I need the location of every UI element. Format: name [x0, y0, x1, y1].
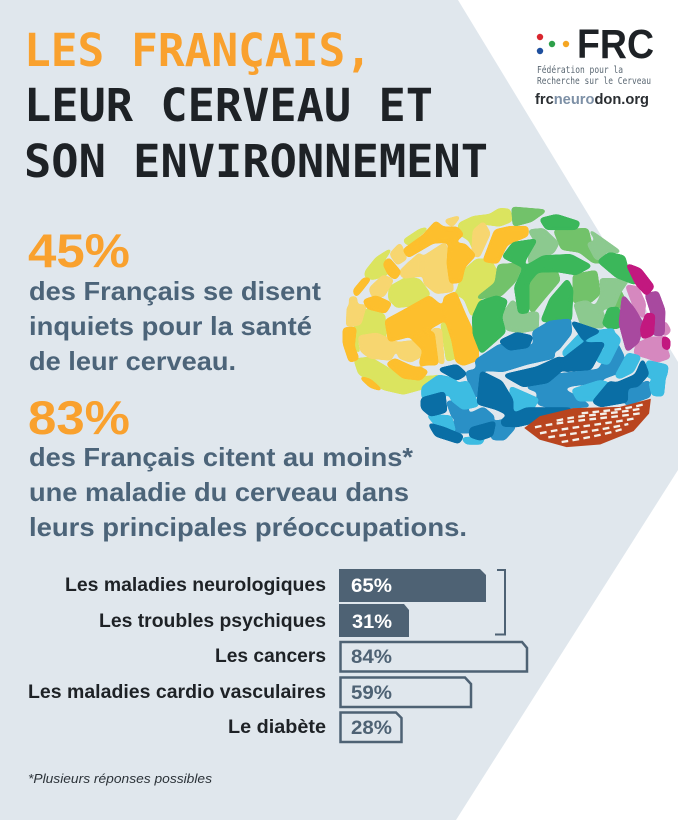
title: SON ENVIRONNEMENT [24, 135, 488, 188]
statistic: 45%: inquiets pour la santé [29, 311, 312, 341]
bar chart: diseases [28, 569, 527, 742]
logo: FRC: frcneurodon.org [535, 91, 649, 108]
statistic: 83%: des Français citent au moins* [29, 442, 414, 472]
brain: occipital lobe pink [627, 286, 670, 361]
brain: frontal lobe pale [347, 217, 489, 364]
logo: FRC: FRC [577, 21, 654, 67]
icon: coloured brain [344, 208, 670, 447]
statistic: 45%: 45% [28, 224, 130, 277]
brain: temporal lobe light blue [423, 329, 667, 443]
row: Les maladies cardio vasculaires 59%: 59% [351, 683, 392, 704]
statistic: 83%: 83% [28, 391, 130, 444]
logo: FRC: Recherche sur le Cerveau [537, 76, 651, 87]
row: Les cancers 84% [215, 642, 527, 672]
row: Les maladies neurologiques 65% [65, 569, 486, 602]
statistic: 83% [28, 391, 467, 542]
brain: parietal lobe green [473, 215, 636, 353]
brain: occipital lobe purple [620, 292, 664, 351]
statistic: 83%: leurs principales préoccupations. [29, 512, 467, 542]
row: Les maladies neurologiques 65%: 65% [351, 576, 392, 597]
row: Les cancers 84%: Les cancers [215, 646, 326, 667]
title: LEUR CERVEAU ET [24, 79, 433, 132]
brain: parietal lobe pale green [503, 229, 628, 332]
brain: parietal lobe mid green [477, 208, 626, 313]
row: Les troubles psychiques 31% [99, 604, 409, 637]
row: Les maladies cardio vasculaires 59% [28, 678, 471, 707]
row: Le diabète 28%: Le diabète [228, 717, 326, 738]
logo: FRC [535, 21, 654, 108]
row: Les troubles psychiques 31%: 31% [352, 612, 392, 633]
statistic: 45% [28, 224, 321, 376]
bracket [495, 570, 505, 634]
brain: temporal lobe mid blue [447, 320, 650, 439]
brain: frontal lobe orange [344, 222, 527, 390]
row: Les maladies cardio vasculaires 59%: Les maladies cardio vasculaires [28, 682, 326, 703]
row: Les troubles psychiques 31%: Les troubles psychiques [99, 611, 326, 632]
row: Les cancers 84%: 84% [351, 647, 392, 668]
brain: cerebellum [525, 399, 650, 447]
footnote: *Plusieurs réponses possibles [28, 772, 212, 786]
statistic: 45%: de leur cerveau. [29, 346, 236, 376]
statistic: 83%: une maladie du cerveau dans [29, 477, 409, 507]
row: Les maladies neurologiques 65%: Les maladies neurologiques [65, 575, 326, 596]
brain: temporal lobe dark blue [422, 322, 648, 443]
row: Le diabète 28%: 28% [351, 718, 392, 739]
title [24, 24, 488, 188]
brain: occipital lobe magenta [627, 265, 669, 349]
logo: FRC: Fédération pour la [537, 65, 623, 76]
brain: frontal lobe lime [350, 209, 511, 393]
title: LES FRANÇAIS, [24, 24, 372, 77]
row: Le diabète 28% [228, 712, 402, 742]
statistic: 45%: des Français se disent [29, 276, 321, 306]
